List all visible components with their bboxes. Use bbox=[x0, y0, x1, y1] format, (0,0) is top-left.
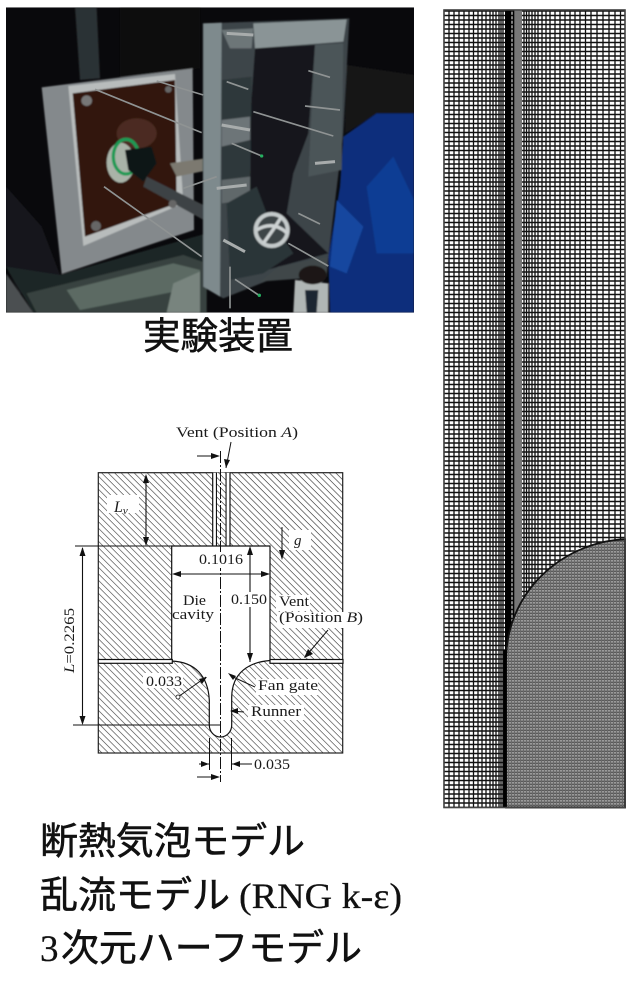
diagram labels: Vent (Position A) bbox=[176, 425, 298, 441]
text block: model list: (RNG k-ε) bbox=[239, 876, 402, 916]
diagram labels: cavity bbox=[172, 607, 215, 623]
diagram labels: v bbox=[123, 505, 128, 517]
text block: model list: 乱流モデル bbox=[40, 874, 230, 916]
diagram labels: Fan gate bbox=[258, 678, 318, 694]
diagram labels: L bbox=[114, 499, 123, 516]
vent at position B bbox=[98, 660, 343, 663]
dimension lines bbox=[73, 476, 270, 725]
heading: apparatus caption: 実験装置 bbox=[143, 315, 293, 357]
diagram labels: g bbox=[294, 533, 302, 549]
arrowheads bbox=[80, 453, 313, 780]
text block: model list: 次元ハーフモデル bbox=[61, 927, 362, 969]
mesh horizontal lines bbox=[444, 10, 625, 808]
diagram labels: 0.150 bbox=[231, 592, 267, 608]
text block: model list: 3 bbox=[40, 929, 58, 970]
diagram labels: 0.035 bbox=[254, 757, 290, 773]
diagram: die cavity schematic bbox=[62, 425, 365, 782]
photo: experimental apparatus bbox=[6, 7, 414, 313]
diagram labels bbox=[62, 425, 365, 773]
diagram labels: 0.033 bbox=[146, 674, 182, 690]
diagram labels: Die bbox=[183, 593, 206, 609]
tarp bbox=[328, 113, 414, 313]
diagram labels: Runner bbox=[251, 704, 301, 720]
melt region fine mesh bbox=[506, 539, 625, 808]
vent at position A bbox=[213, 473, 230, 546]
diagram labels: L=0.2265 bbox=[62, 608, 78, 674]
near-wall refined band bbox=[514, 10, 522, 650]
text block: model list bbox=[40, 820, 402, 970]
diagram labels: Vent bbox=[279, 594, 310, 610]
diagram labels: 0.1016 bbox=[199, 552, 244, 568]
acrylic plate bbox=[203, 18, 349, 298]
mesh vertical lines bbox=[449, 10, 620, 807]
hatched die body bbox=[98, 473, 343, 753]
die cavity opening bbox=[172, 546, 270, 737]
text block: model list: 断熱気泡モデル bbox=[40, 820, 305, 862]
diagram labels: (Position B) bbox=[279, 610, 363, 626]
chart: computational mesh bbox=[444, 10, 625, 808]
apparatus frame bbox=[42, 68, 194, 274]
